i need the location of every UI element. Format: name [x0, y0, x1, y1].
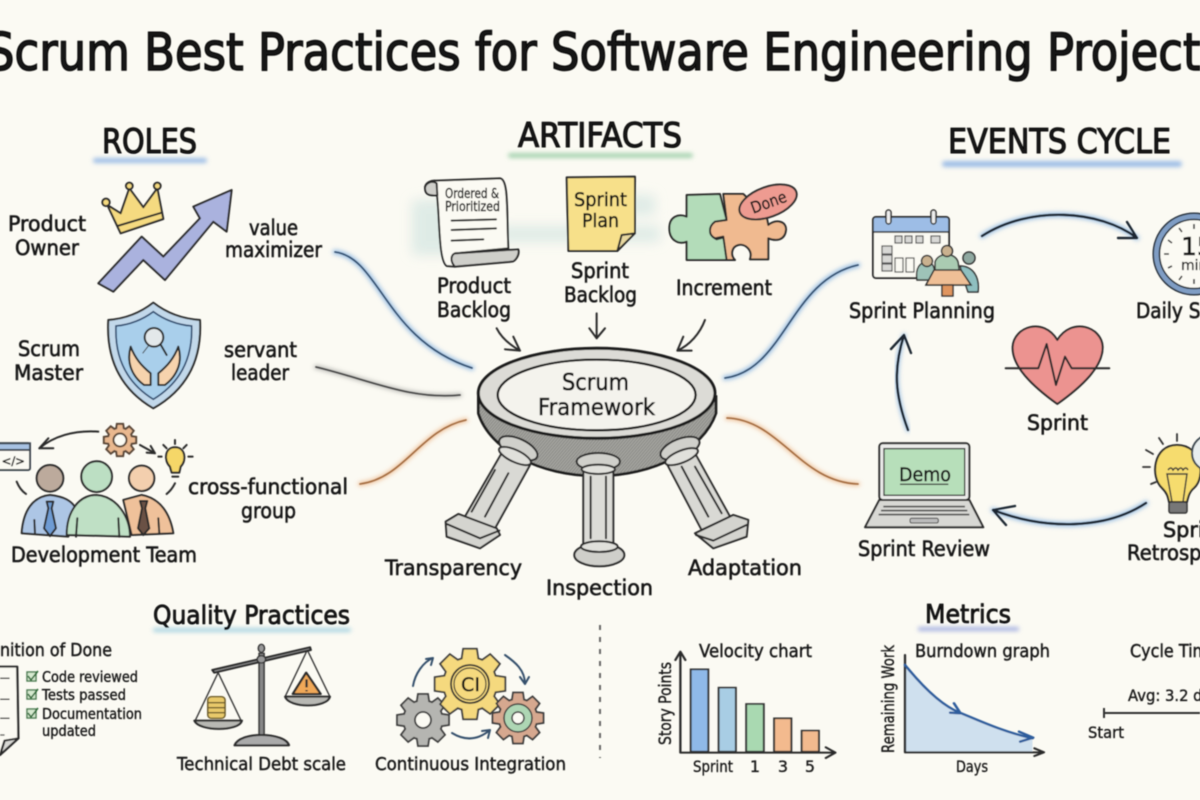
diagram: scrum framework table: [384, 348, 802, 600]
axis labels: sprint numbers: [693, 757, 815, 776]
role: development team label: Development Team: [11, 543, 197, 567]
pillar: inspection: [574, 453, 624, 566]
heading: quality practices: Quality Practices: [153, 601, 350, 631]
icon: demo laptop: [865, 443, 983, 527]
role: product owner label: [8, 212, 86, 260]
checklist: Code reviewed: [42, 668, 138, 686]
pillar: transparency: [446, 431, 541, 548]
icon: team lightbulb: [158, 440, 193, 477]
icon: continuous integration gears: CI: [461, 674, 480, 696]
icon: continuous integration gears: [397, 649, 543, 746]
heading: metrics: Metrics: [925, 600, 1011, 630]
checklist: [27, 668, 142, 740]
arrow: planning to daily scrum: [982, 215, 1137, 238]
icon: sprint plan sticky note: [567, 177, 635, 251]
icon: code window: [0, 443, 30, 470]
text: scrum framework: Scrum: [562, 370, 629, 396]
role: cross-functional group label: group: [241, 499, 296, 523]
icon: planning meeting people: [917, 246, 978, 296]
role: product owner label: Owner: [15, 236, 79, 260]
arrow: retrospective to review: [993, 503, 1146, 525]
axis label: remaining work: Remaining Work: [879, 645, 899, 753]
label: velocity chart: Velocity chart: [699, 641, 812, 662]
arrows: team flow: [39, 431, 155, 453]
label: sprint retrospective: [1127, 518, 1200, 565]
role: cross-functional group label: cross-functional: [188, 475, 348, 499]
role: value maximizer label: maximizer: [225, 238, 322, 262]
label: technical debt scale: Technical Debt scale: [176, 754, 346, 775]
label: increment: Increment: [676, 276, 772, 300]
axis labels: sprint numbers: 3: [778, 757, 788, 776]
panel: artifacts: [412, 116, 801, 351]
axis labels: sprint numbers: 5: [805, 757, 815, 776]
icon: technical debt scale: [194, 644, 330, 745]
icon: definition of done document: [0, 667, 18, 755]
panel: events cycle: [849, 122, 1200, 565]
label: sprint: Sprint: [1027, 411, 1088, 435]
text: sprint plan: Sprint: [574, 189, 627, 211]
axis labels: sprint numbers: 1: [750, 757, 760, 776]
heading: artifacts: ARTIFACTS: [518, 116, 682, 156]
panel: quality practices: [0, 601, 566, 775]
label: sprint planning: Sprint Planning: [849, 299, 995, 323]
role: scrum master label: [14, 337, 83, 385]
heading: roles: ROLES: [102, 122, 197, 162]
icon: 15 minute clock: [1154, 214, 1200, 294]
role: servant leader label: servant: [224, 338, 297, 362]
icon: shield with hands: [108, 303, 200, 408]
role: scrum master label: Scrum: [18, 337, 80, 361]
label: product backlog: Backlog: [437, 298, 511, 322]
label: sprint backlog: Backlog: [564, 283, 637, 307]
text: sprint plan: Plan: [582, 210, 619, 232]
connectors: framework to events: [725, 265, 858, 484]
role: servant leader label: leader: [231, 361, 289, 385]
arrows: CI loop: [413, 655, 529, 738]
panel: metrics: [656, 600, 1200, 776]
checklist: Tests passed: [41, 686, 126, 704]
icon: rising arrow: [98, 190, 232, 292]
role: servant leader label: [224, 338, 297, 385]
label: sprint backlog: Sprint: [571, 259, 629, 283]
icon: team gear: [104, 424, 136, 456]
role: cross-functional group label: [188, 475, 348, 523]
label: burndown graph: Burndown graph: [915, 641, 1050, 662]
label: start: Start: [1088, 723, 1124, 742]
icon: calendar: [873, 210, 949, 278]
label: sprint review: Sprint Review: [858, 537, 990, 561]
label: product backlog: Product: [437, 274, 511, 298]
arrow: review to planning: [891, 335, 911, 430]
label: product backlog: [437, 274, 511, 322]
icon: retrospective lightbulb: [1143, 434, 1200, 513]
arrows: artifacts to framework: [497, 313, 705, 351]
checklist: Documentation: [42, 705, 142, 723]
pillar: adaptation: [657, 432, 748, 548]
text: sprint plan: [574, 189, 627, 232]
chart: velocity bars: [675, 652, 835, 758]
badge: done: [735, 178, 801, 226]
text: ordered and prioritized: Prioritized: [445, 200, 500, 215]
icon: sprint heart with pulse: [1006, 326, 1109, 404]
label: transparency: Transparency: [384, 556, 522, 580]
text: demo: Demo: [899, 464, 951, 486]
label: adaptation: Adaptation: [688, 556, 802, 580]
text: scrum framework: [538, 370, 656, 421]
icon: code window: </>: [2, 454, 25, 468]
watercolor wash behind artifacts: [412, 195, 660, 255]
label: sprint backlog: [564, 259, 637, 307]
role: value maximizer label: [225, 216, 322, 262]
role: product owner label: Product: [8, 212, 86, 236]
icon: development team: [17, 461, 175, 537]
icon: crown: [102, 183, 163, 233]
table top: [478, 348, 716, 476]
badge: done: Done: [748, 187, 789, 218]
chart: burndown: [905, 655, 1044, 756]
label: continuous integration: Continuous Integration: [375, 754, 566, 775]
heading: events cycle: EVENTS CYCLE: [948, 122, 1171, 162]
role: scrum master label: Master: [14, 361, 83, 385]
label: inspection: Inspection: [546, 576, 653, 600]
icon: product backlog scroll: [425, 178, 519, 267]
panel: roles: [0, 122, 348, 567]
timeline: [1104, 708, 1200, 718]
text: ordered and prioritized: Ordered &: [445, 187, 499, 202]
text: scrum framework: Framework: [538, 395, 656, 421]
axis labels: sprint numbers: Sprint: [693, 757, 733, 776]
connectors: roles to framework: [316, 252, 472, 484]
axis label: days: Days: [956, 757, 988, 776]
axis label: story points: Story Points: [656, 662, 676, 745]
role: value maximizer label: value: [249, 216, 298, 240]
icon: increment puzzle: [669, 194, 786, 260]
checklist: updated: [42, 722, 96, 740]
text: ordered and prioritized: [445, 187, 500, 215]
